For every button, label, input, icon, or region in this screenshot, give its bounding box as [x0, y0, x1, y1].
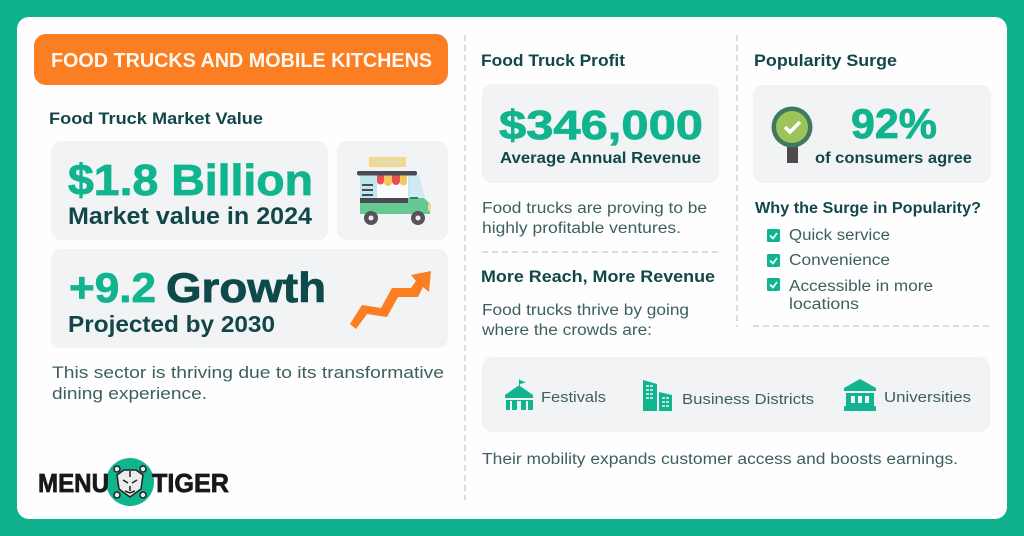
text: profit note: highly profitable ventures.: [482, 220, 681, 237]
heading: popularity surge: Popularity Surge: [754, 51, 897, 70]
item: accessible: [767, 278, 933, 313]
profit figure: $346,000: [499, 102, 703, 148]
title: FOOD TRUCKS AND MOBILE KITCHENS: [51, 50, 432, 72]
growth caption: Projected by 2030: [68, 311, 275, 337]
text: mobility note: Their mobility expands customer access and boosts earnings.: [482, 451, 958, 468]
icon: tiger face: [114, 466, 146, 498]
panel: truck icon: [337, 141, 448, 240]
market value caption: Market value in 2024: [68, 203, 313, 230]
logo: Menu Tiger: [38, 458, 229, 506]
text: crowds note: Food trucks thrive by going: [482, 302, 689, 319]
growth word: Growth: [166, 264, 326, 311]
heading: more reach: More Reach, More Revenue: [481, 268, 715, 286]
icon: food truck: [357, 157, 431, 225]
icon: magnifier check: [772, 106, 812, 163]
icon: university building: [844, 379, 876, 411]
item: accessible: locations: [789, 296, 859, 313]
heading: market value: Food Truck Market Value: [49, 110, 263, 128]
text: sector note: This sector is thriving due to its transformative: [52, 363, 444, 382]
panel: profit: [482, 84, 719, 183]
popularity figure: 92%: [851, 100, 937, 147]
panel: growth: [51, 249, 448, 348]
panel: locations: [482, 357, 990, 432]
logo: Menu Tiger: MENU: [38, 468, 109, 498]
heading: why the surge: Why the Surge in Popularity?: [755, 200, 981, 217]
icon: festival tent: [505, 379, 533, 410]
popularity caption: of consumers agree: [815, 150, 972, 167]
logo: Menu Tiger: TIGER: [152, 468, 229, 498]
icon: rising arrow: [350, 271, 431, 329]
item: convenience: Convenience: [789, 252, 890, 269]
item: quick service: Quick service: [789, 227, 890, 244]
profit caption: Average Annual Revenue: [500, 150, 701, 167]
item: accessible: Accessible in more: [789, 278, 933, 295]
label: universities: Universities: [884, 389, 971, 406]
text: sector note: [52, 363, 444, 403]
panel: popularity: [753, 85, 991, 183]
panel: market value: [51, 141, 328, 240]
title: [34, 34, 448, 85]
text: profit note: [482, 200, 707, 237]
label: festivals: Festivals: [541, 389, 606, 406]
growth figure: +9.2: [69, 264, 156, 311]
list: surge reasons: [767, 227, 933, 313]
text: profit note: Food trucks are proving to be: [482, 200, 707, 217]
text: crowds note: [481, 302, 689, 339]
label: business districts: Business Districts: [682, 391, 814, 408]
heading: food truck profit: Food Truck Profit: [481, 51, 625, 70]
icon: office buildings: [643, 380, 672, 411]
text: sector note: dining experience.: [52, 384, 207, 403]
text: crowds note: where the crowds are:: [481, 322, 652, 339]
market value figure: $1.8 Billion: [68, 156, 313, 205]
